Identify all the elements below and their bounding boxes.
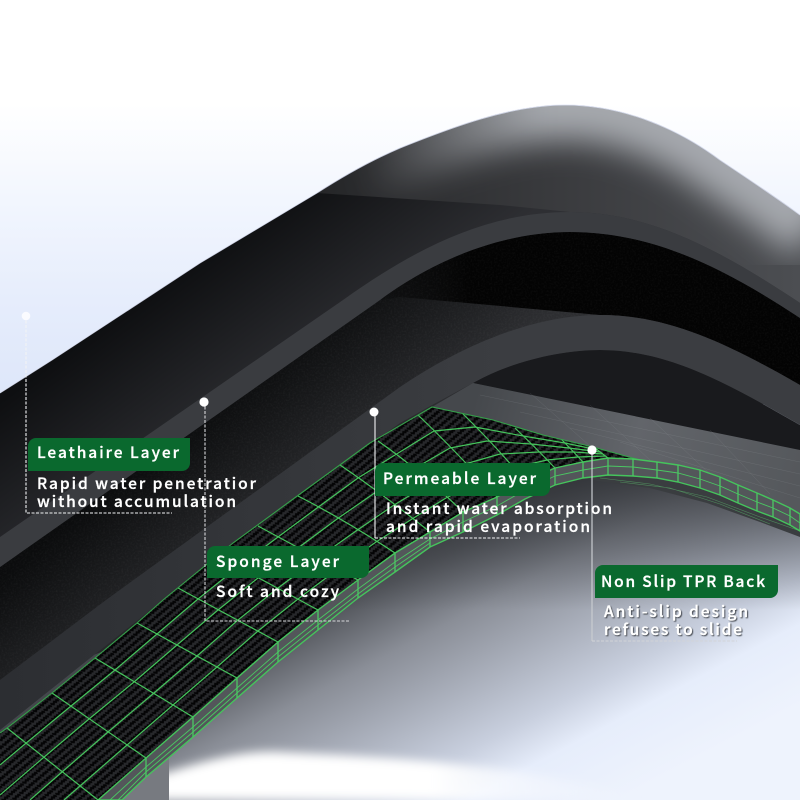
description xyxy=(604,600,748,640)
wireframe grid lines xyxy=(0,413,608,800)
description: refuses to slide xyxy=(604,618,742,640)
layer band: first edge strip xyxy=(0,212,800,567)
strip ticks xyxy=(146,458,790,777)
mesh surface xyxy=(0,408,632,800)
background: sky and floor xyxy=(0,163,800,800)
heading: Leathaire Layer xyxy=(37,441,180,463)
callout: sponge layer xyxy=(207,546,369,602)
callout: permeable layer xyxy=(375,463,612,537)
heading: Sponge Layer xyxy=(216,550,340,572)
heading: Permeable Layer xyxy=(383,467,537,489)
layer: dark middle layer xyxy=(0,232,800,680)
leader: non slip back xyxy=(587,445,737,641)
description: Rapid water penetratior xyxy=(37,472,257,494)
strip inner lines xyxy=(110,466,800,800)
callout: leathaire layer xyxy=(28,438,257,512)
upper wireframe edge xyxy=(0,407,640,733)
label badge xyxy=(595,565,778,598)
label badge xyxy=(207,546,369,578)
underside: grey grid panel xyxy=(432,383,800,514)
leader: leathaire layer xyxy=(22,312,172,513)
label badge xyxy=(28,438,190,471)
mat top layer: leathaire surface xyxy=(0,105,800,560)
description: without accumulation xyxy=(37,490,236,512)
description: Anti-slip design xyxy=(604,600,748,622)
layer: green wireframe non-slip back xyxy=(0,406,800,800)
description: Instant water absorption xyxy=(386,497,612,519)
description: Soft and cozy xyxy=(216,580,340,602)
leader: sponge layer xyxy=(199,397,350,621)
underside: dark textured fabric xyxy=(473,350,800,452)
label badge xyxy=(375,463,550,496)
layer band: second edge strip xyxy=(0,315,800,730)
description xyxy=(386,497,612,537)
underside hatch below strip xyxy=(583,475,800,537)
side strip xyxy=(98,458,800,800)
description: and rapid evaporation xyxy=(386,515,590,537)
description xyxy=(37,472,257,512)
heading: Non Slip TPR Back xyxy=(601,570,765,592)
leader: permeable layer xyxy=(370,408,520,538)
callout: non slip tpr back xyxy=(595,565,778,640)
